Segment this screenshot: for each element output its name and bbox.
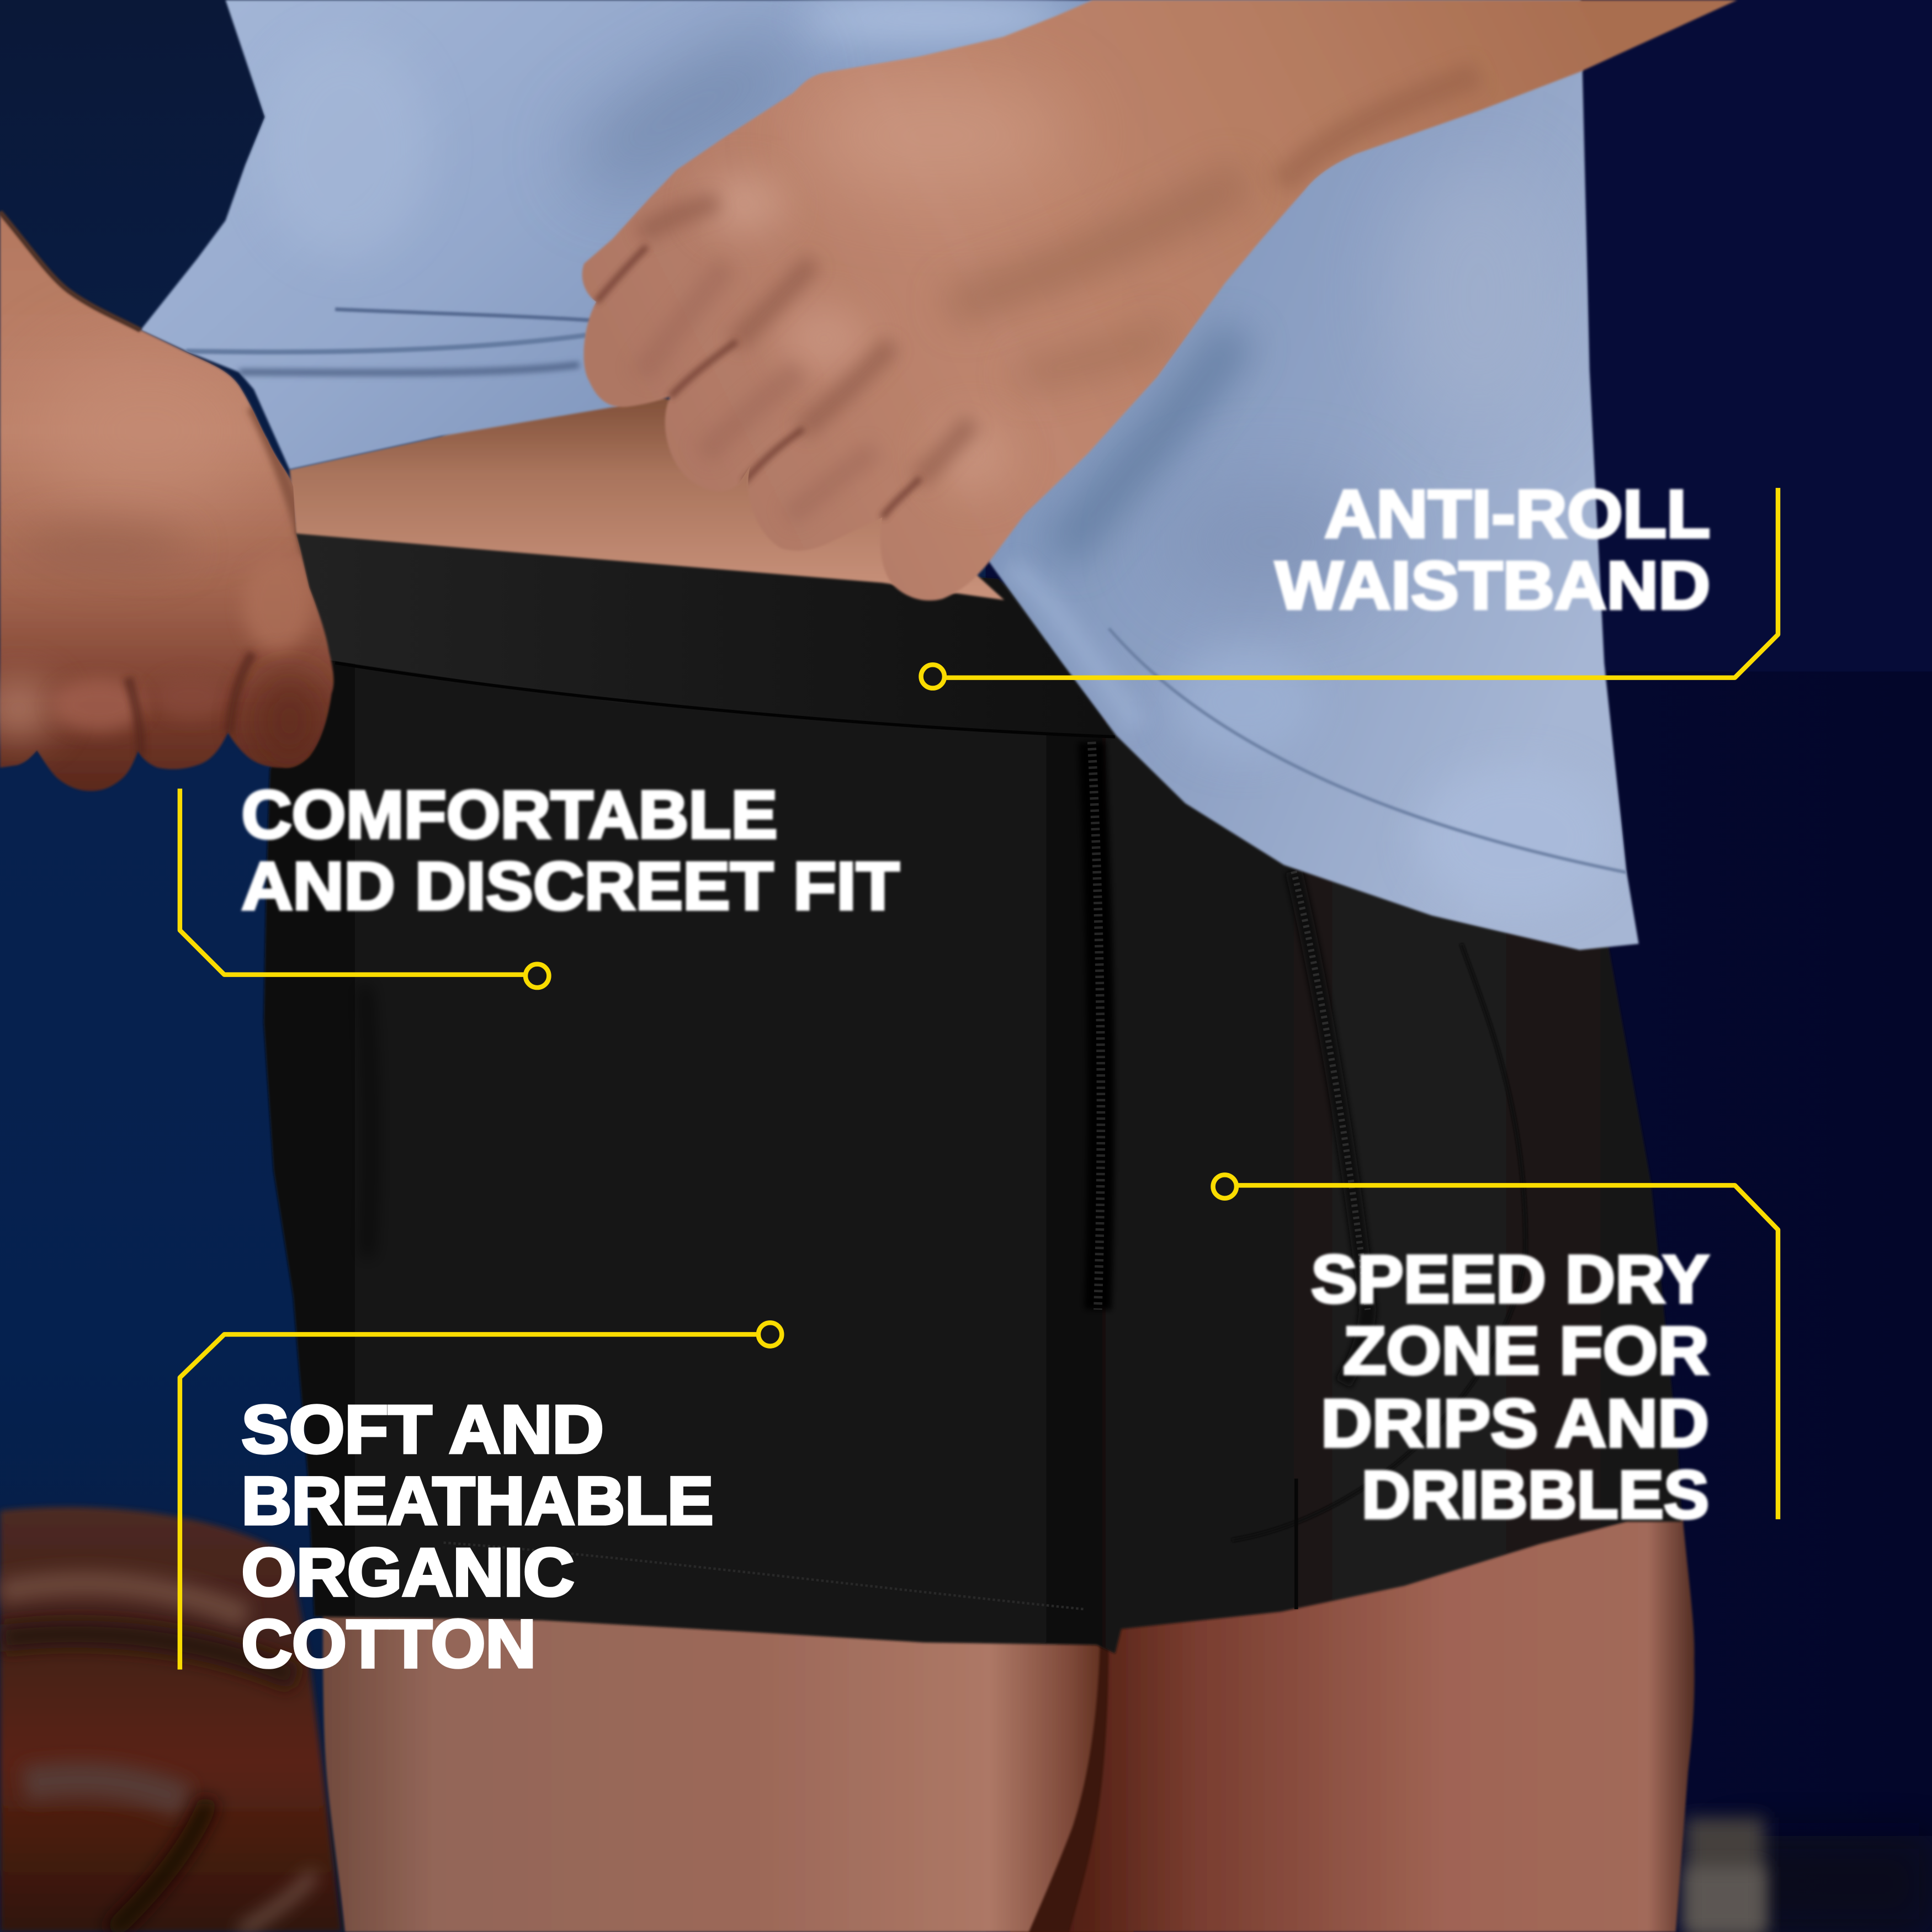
pouch seam <box>1232 944 1526 1540</box>
label: DRIBBLES <box>1362 1457 1709 1533</box>
label: WAISTBAND <box>1275 548 1710 624</box>
leader line <box>945 488 1778 678</box>
callout: soft and breathable organic cotton <box>180 1323 782 1682</box>
marker <box>921 665 944 688</box>
callout: speed dry zone <box>1213 1175 1778 1533</box>
left panel folds <box>186 0 1072 373</box>
waistband <box>293 524 1115 737</box>
label <box>1311 1241 1709 1533</box>
right panel folds <box>1010 160 1626 912</box>
leg hem stitching <box>444 1543 1084 1609</box>
black boxer briefs <box>264 524 1682 1654</box>
label: ORGANIC <box>242 1535 574 1611</box>
label: AND DISCREET FIT <box>242 848 899 924</box>
label <box>242 777 899 924</box>
callout: comfortable and discreet fit <box>180 777 899 988</box>
leader line <box>180 789 525 975</box>
waistband seam <box>335 663 1115 737</box>
right hand and forearm <box>582 0 1737 601</box>
label: SOFT AND <box>242 1392 604 1468</box>
fly seams <box>1092 742 1101 1310</box>
label: COTTON <box>242 1606 536 1682</box>
blue t-shirt: left panel <box>140 0 1093 469</box>
arm hair edge <box>0 212 140 330</box>
callout: anti-roll waistband <box>921 476 1778 688</box>
label: ZONE FOR <box>1343 1313 1709 1389</box>
left arm and fist <box>0 212 333 791</box>
label: DRIPS AND <box>1321 1386 1709 1462</box>
marker <box>1213 1175 1236 1198</box>
bare waist <box>290 372 1004 600</box>
label: SPEED DRY <box>1311 1241 1709 1317</box>
leader line <box>180 1334 758 1670</box>
left thigh <box>323 1602 1100 1932</box>
label <box>242 1392 713 1682</box>
label: BREATHABLE <box>242 1463 713 1539</box>
label: ANTI-ROLL <box>1325 476 1710 552</box>
finger shadows <box>641 202 972 481</box>
finger gaps <box>596 246 920 518</box>
fist shading <box>0 345 327 770</box>
label <box>1275 476 1710 624</box>
label: COMFORTABLE <box>242 777 777 853</box>
shadow between the legs <box>1010 1626 1134 1932</box>
leader line <box>1238 1185 1778 1519</box>
side panel shadow <box>365 986 370 1257</box>
marker <box>758 1323 782 1346</box>
marker <box>526 964 549 988</box>
blue t-shirt: right panel <box>988 0 1639 950</box>
leather couch <box>0 1507 343 1932</box>
right thigh <box>1070 1509 1695 1932</box>
hand shading <box>596 74 1479 517</box>
